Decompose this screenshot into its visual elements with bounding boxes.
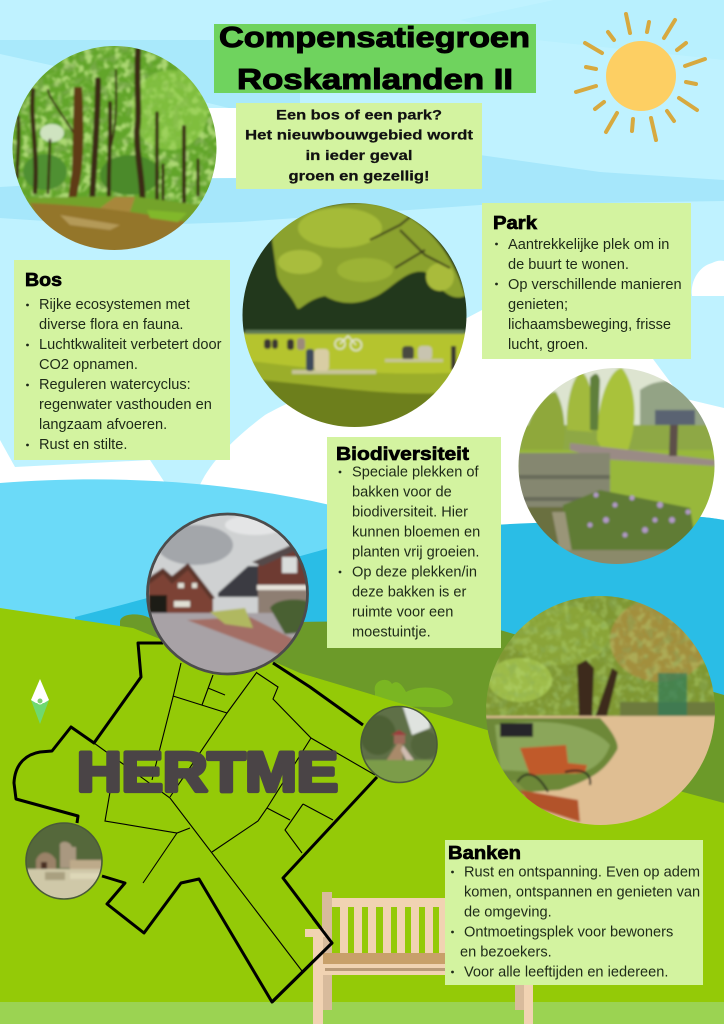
panel: park: lucht, groen. xyxy=(508,337,588,353)
icon: compass xyxy=(31,679,49,724)
panel: bos: Bos xyxy=(25,270,62,290)
icon: wooden bench xyxy=(305,892,533,1024)
background: blue water xyxy=(0,479,724,720)
panel: park xyxy=(482,203,691,359)
panel: banken xyxy=(445,840,703,985)
panel: biodiversiteit: Biodiversiteit xyxy=(336,443,469,464)
panel: biodiversiteit: kunnen bloemen en xyxy=(352,524,480,540)
panel: park: de buurt te wonen. xyxy=(508,257,629,273)
background: dark green hill xyxy=(120,614,724,900)
panel: biodiversiteit: planten vrij groeien. xyxy=(352,544,479,560)
panel: biodiversiteit: bakken voor de xyxy=(352,484,452,500)
panel: bos: langzaam afvoeren. xyxy=(39,417,167,433)
photo: park xyxy=(240,200,470,430)
photo: path with benches xyxy=(484,594,718,828)
intro text block: Een bos of een park? xyxy=(276,106,442,122)
panel: biodiversiteit xyxy=(327,437,501,648)
panel: bos: Rust en stilte. xyxy=(39,437,127,453)
map: neighbourhood outline xyxy=(14,643,377,1002)
panel: bos: Reguleren watercyclus: xyxy=(39,377,191,393)
panel: bos: Rijke ecosystemen met xyxy=(39,297,190,313)
panel: bos: diverse flora en fauna. xyxy=(39,317,183,333)
title: Compensatiegroen xyxy=(219,22,530,54)
intro text block: groen en gezellig! xyxy=(288,168,430,184)
panel: biodiversiteit: Op deze plekken/in xyxy=(352,564,477,580)
title: Roskamlanden II xyxy=(237,64,513,96)
photo: ruins xyxy=(25,822,103,900)
panel: park: Op verschillende manieren xyxy=(508,277,682,293)
background: ground strip xyxy=(0,1002,724,1024)
panel: banken: Voor alle leeftijden en iedereen. xyxy=(464,964,668,980)
panel: banken: Ontmoetingsplek voor bewoners xyxy=(464,924,673,940)
intro text block xyxy=(236,103,482,189)
sun xyxy=(576,14,705,140)
panel: biodiversiteit: moestuintje. xyxy=(352,624,431,640)
background: white clouds xyxy=(0,310,724,530)
panel: bos: regenwater vasthouden en xyxy=(39,397,212,413)
map: outline over bench xyxy=(272,918,332,1002)
map: street lines xyxy=(94,663,375,971)
intro text block: in ieder geval xyxy=(306,147,412,163)
panel: biodiversiteit: biodiversiteit. Hier xyxy=(352,504,468,520)
panel: banken: Rust en ontspanning. Even op adem xyxy=(464,864,700,880)
panel: bos: CO2 opnamen. xyxy=(39,357,138,373)
panel: park: Park xyxy=(493,213,538,233)
title xyxy=(214,22,536,96)
background: bright green hill xyxy=(0,608,724,1024)
photo: garden with planters xyxy=(515,365,720,570)
panel: bos xyxy=(14,260,230,460)
panel: banken: en bezoekers. xyxy=(460,944,552,960)
panel: biodiversiteit: ruimte voor een xyxy=(352,604,453,620)
panel: bos: Luchtkwaliteit verbetert door xyxy=(39,337,222,353)
panel: park: Aantrekkelijke plek om in xyxy=(508,237,669,253)
panel: banken: de omgeving. xyxy=(464,904,552,920)
photo: playground xyxy=(360,706,438,784)
photo: houses xyxy=(145,512,311,679)
panel: biodiversiteit: Speciale plekken of xyxy=(352,464,480,480)
photo: forest xyxy=(10,44,220,254)
panel: park: genieten; xyxy=(508,297,568,313)
bush xyxy=(375,680,453,708)
panel: biodiversiteit: deze bakken is er xyxy=(352,584,467,600)
panel: banken: Banken xyxy=(448,842,521,863)
panel: banken: komen, ontspannen en genieten van xyxy=(464,884,700,900)
panel: park: lichaamsbeweging, frisse xyxy=(508,317,671,333)
intro text block: Het nieuwbouwgebied wordt xyxy=(245,126,473,142)
label: HERTME: HERTME xyxy=(77,740,338,803)
